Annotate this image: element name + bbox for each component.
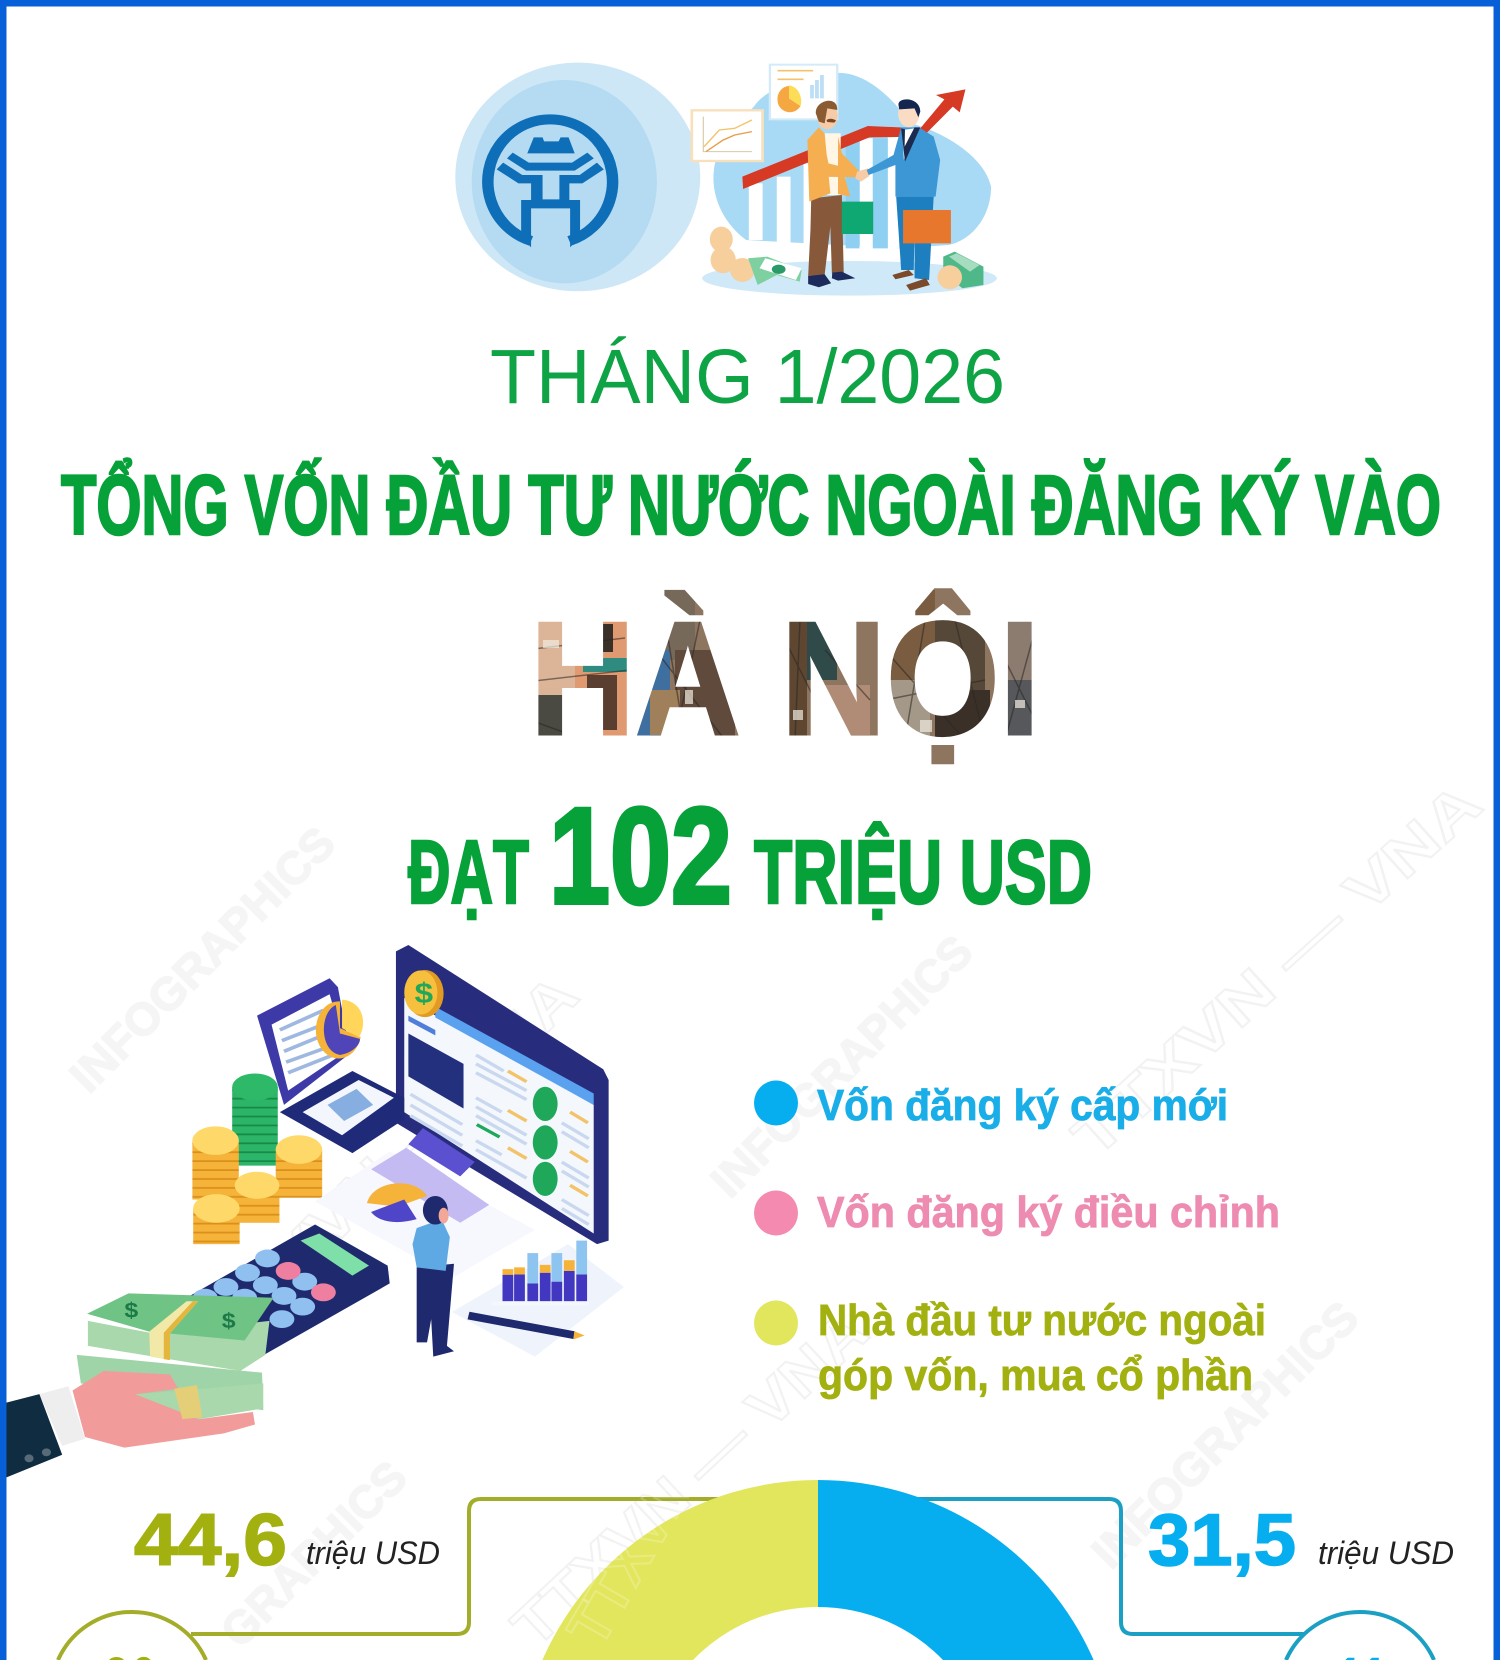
watermark text: INFOGRAPHICS <box>1081 1291 1368 1578</box>
value: foreign investors contribution: triệu USD <box>306 1535 440 1571</box>
legend <box>754 1080 1280 1400</box>
value: foreign investors contribution <box>134 1500 440 1581</box>
legend item: adjusted capital: Vốn đăng ký điều chỉnh <box>817 1188 1280 1237</box>
person looking at screen <box>413 1196 454 1357</box>
calculator <box>187 1225 390 1358</box>
icon: dollar coin: $ <box>415 977 433 1010</box>
connector: right <box>880 1499 1306 1634</box>
illustration: finance workspace with monitor, coins, calculator and money <box>5 945 624 1478</box>
icon: Hanoi emblem in blue circle <box>455 63 700 291</box>
title: Hà Nội with photo fill: HÀ NỘI <box>530 589 1040 769</box>
coins and money <box>710 227 983 289</box>
money stack: $ <box>222 1309 236 1333</box>
value: foreign investors contribution: 44,6 <box>134 1500 287 1581</box>
value: new registered capital <box>1148 1500 1454 1581</box>
legend item: new capital: Vốn đăng ký cấp mới <box>817 1081 1228 1130</box>
connector: left <box>191 1499 760 1634</box>
watermark text: TTXVN — VNA <box>1060 770 1494 1170</box>
icon: orange briefcase <box>903 210 951 243</box>
money stack: $ <box>124 1298 138 1322</box>
legend item: capital contribution and share purchase <box>754 1296 1266 1400</box>
value: new registered capital: triệu USD <box>1318 1535 1454 1571</box>
donut chart: TTXVN <box>555 1459 706 1656</box>
icon: green briefcase <box>842 202 873 234</box>
person: man in orange jacket <box>807 101 869 287</box>
icon: dollar coin <box>404 970 444 1017</box>
circle: left count <box>58 1612 206 1660</box>
person: man in blue suit <box>867 99 940 291</box>
monitor <box>396 945 609 1244</box>
value: new registered capital: 31,5 <box>1148 1500 1296 1581</box>
money stack <box>77 1293 274 1410</box>
title: total amount: 102 <box>549 780 732 933</box>
title: total amount: ĐẠT <box>408 823 529 923</box>
watermark text: GRAPHICS <box>210 1451 417 1657</box>
watermark text: INFOGRAPHICS <box>59 816 345 1102</box>
hand holding money <box>5 1371 263 1478</box>
legend item: capital contribution and share purchase: góp vốn, mua cổ phần <box>818 1351 1253 1400</box>
title: month: THÁNG 1/2026 <box>490 334 1005 420</box>
legend item: capital contribution and share purchase: Nhà đầu tư nước ngoài <box>818 1296 1266 1345</box>
watermark text <box>59 770 1494 1660</box>
chart card: pie and bars <box>770 65 837 119</box>
illustration: business handshake with growth arrow <box>692 65 997 296</box>
donut chart <box>542 1459 1094 1660</box>
title: total amount: TRIỆU USD <box>754 821 1092 923</box>
document with pie chart <box>315 1148 535 1278</box>
coin stacks <box>192 1074 322 1244</box>
watermark text: INFOGRAPHICS <box>700 925 982 1207</box>
chart card: line graph <box>692 110 763 161</box>
bar chart on paper with pen <box>452 1241 624 1357</box>
watermark text: TTXVN — VNA <box>198 962 591 1354</box>
arrow: rising growth <box>742 89 965 189</box>
title: total amount <box>408 780 1092 933</box>
circle: right count <box>1286 1612 1434 1660</box>
watermark text: TTXVN — VNA <box>500 1298 880 1660</box>
laptop <box>257 978 404 1153</box>
